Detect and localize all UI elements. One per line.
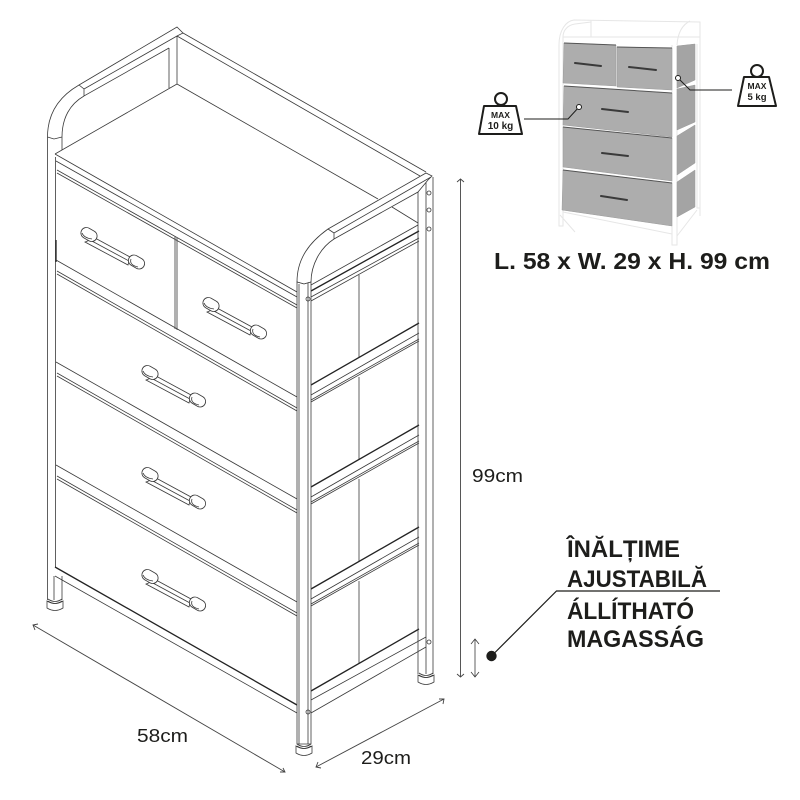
back right post [418,176,433,674]
callout text: adjustable height: MAGASSÁG [567,625,704,653]
weight icon: max 10 kg [479,93,522,134]
weight icon: max 5 kg [738,65,776,106]
right back foot [418,673,434,684]
front drawers [562,43,672,226]
weight icon: max 5 kg: 5 kg [747,92,767,103]
back panel and shelf top [55,33,426,297]
callout text: adjustable height: ÎNĂLȚIME [566,535,680,563]
overall dimensions caption: L. 58 x W. 29 x H. 99 cm [494,248,770,274]
drawer handles [79,225,269,613]
leader: 5 kg to shelf [676,76,732,90]
weight icon: max 10 kg: 10 kg [488,121,513,132]
adjustable height arrow [471,639,479,677]
weight icon: max 5 kg: MAX [748,81,767,91]
label: 99cm: 99cm [472,466,523,486]
back left rounded frame [48,27,183,600]
front foot [296,744,312,756]
weight icon: max 10 kg: MAX [491,110,510,120]
label: 29cm: 29cm [361,748,411,768]
callout text: adjustable height: ÁLLÍTHATÓ [567,597,694,625]
front right post [297,282,311,744]
left foot [47,599,63,610]
label: 58cm: 58cm [137,726,188,746]
dimension: height arrow [457,179,464,677]
callout text: adjustable height: AJUSTABILĂ [567,565,707,593]
dimension: depth arrow [316,699,444,768]
drawer fronts and rails [55,170,297,713]
callout text: adjustable height [566,535,707,653]
side panels [677,44,695,217]
dimension: width arrow [33,624,285,772]
side panels and rails [311,225,426,713]
callout leader with dot [486,591,720,661]
front right frame [297,173,432,284]
white frame [559,20,700,245]
leader: 10 kg to drawer [524,104,582,119]
product photo: grey drawer unit [559,20,700,245]
drawer pulls [575,63,656,200]
main illustration: drawer unit line drawing [47,27,434,756]
